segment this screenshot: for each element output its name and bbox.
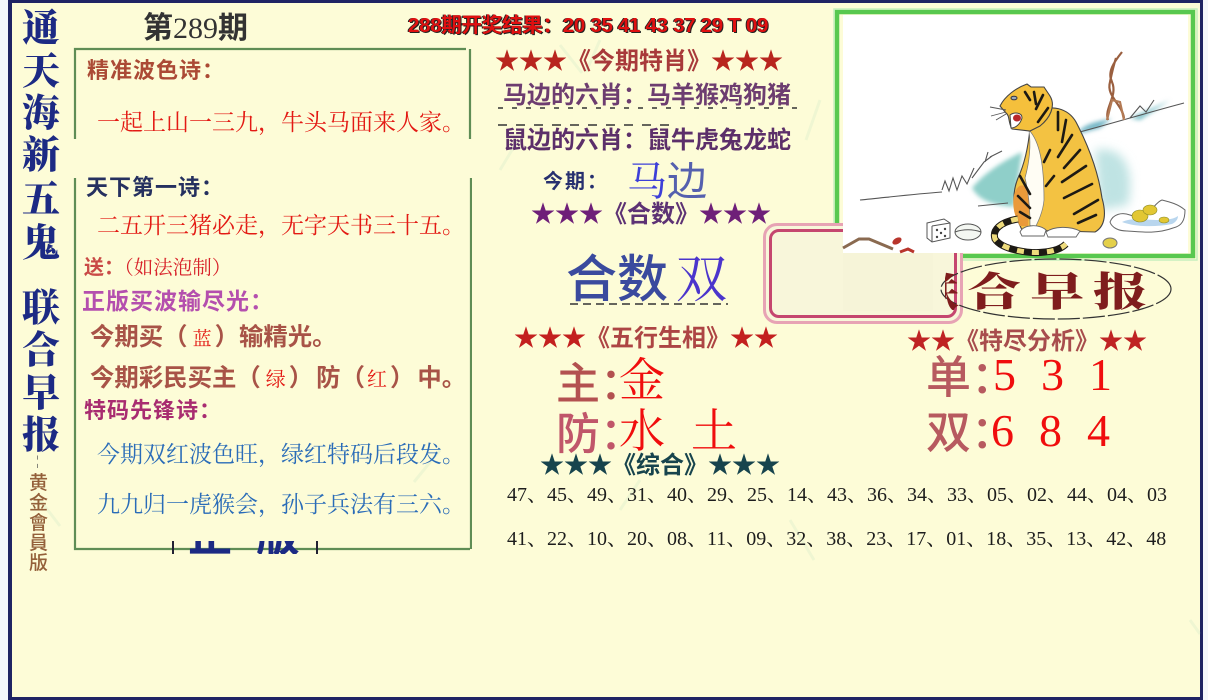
- watercolor hill shading: [1095, 149, 1130, 210]
- numbers row 1: 47、45、49、31、40、29、25、14、43、36、34、33、05、02、44、04、03: [507, 484, 1167, 506]
- heading: precise wave colour poem: 精准波色诗：: [87, 58, 225, 83]
- heading: combined: ★★★《综合》★★★: [540, 445, 780, 480]
- side title: vertical column: 联: [22, 277, 60, 332]
- numbers row 2: 41、22、10、20、08、11、09、32、38、23、17、01、18、35、13、42、48: [507, 528, 1166, 550]
- side title: vertical column: [22, 0, 60, 574]
- heading: first poem under heaven: 天下第一诗：: [86, 175, 224, 200]
- side title: vertical column: 报: [22, 404, 60, 459]
- heading: combined number: ★★★《合数》★★★: [531, 194, 771, 229]
- text: this issue: 今期：: [543, 171, 609, 193]
- side title: vertical column: 早: [22, 362, 60, 417]
- dashed rules: [498, 107, 797, 305]
- white chest: [1025, 130, 1044, 230]
- text: guard element: 防：: [556, 398, 644, 462]
- frame: pink double box: [763, 223, 963, 324]
- red branch: [843, 239, 893, 249]
- text: horse side: 马边的六肖：马羊猴鸡狗猪: [503, 82, 791, 109]
- body: [1014, 108, 1104, 232]
- side title: vertical column: 鬼: [22, 212, 60, 267]
- paws: [1020, 226, 1080, 237]
- orange haunch: [1013, 185, 1030, 226]
- side title: vertical column: 天: [22, 40, 60, 95]
- text: poem 1: 一起上山一三九，牛头马面来人家。: [97, 110, 465, 135]
- stripes: [1018, 92, 1098, 223]
- branches: [1107, 52, 1124, 120]
- side title: vertical column: 新: [22, 124, 60, 179]
- side title: vertical column: ¦: [36, 454, 39, 469]
- side title: vertical column: 海: [22, 82, 60, 137]
- issue heading: 第289期: [143, 3, 248, 47]
- bowl: [955, 224, 981, 240]
- text: gift note: 送：（如法泡制）: [84, 257, 231, 279]
- text: gold: 金: [619, 355, 665, 406]
- panel: tiger illustration: [843, 15, 1188, 253]
- text: combined number double: 合数双: [566, 238, 727, 312]
- previous result line: 288期开奖结果：20 35 41 43 37 29 T 09: [408, 14, 768, 37]
- text: poem 3: 今期双红波色旺，绿红特码后段发。: [97, 442, 465, 467]
- numbers: even: 684: [991, 405, 1135, 456]
- dice: [927, 219, 950, 242]
- heading: special zodiac: ★★★《今期特肖》★★★: [495, 41, 783, 76]
- title fragment: joint morning paper: 合早报: [967, 260, 1156, 317]
- heading: tail analysis: ★★《特尽分析》★★: [907, 321, 1147, 356]
- heading: special code poem: 特码先锋诗：: [84, 398, 222, 423]
- side title: vertical column: 五: [22, 168, 60, 223]
- side title: vertical column: 合: [22, 319, 60, 374]
- text: water earth: 水 土: [619, 406, 737, 457]
- heading: genuine: 正版买波输尽光：: [82, 288, 274, 314]
- text: even: 双：: [926, 396, 1016, 461]
- text: rat side: 鼠边的六肖：鼠牛虎兔龙蛇: [503, 127, 791, 154]
- ground lines and grass: [860, 100, 1184, 206]
- text: horse side answer: 马边: [627, 149, 707, 207]
- panel: poems box: [74, 48, 472, 550]
- text: buy green line: 今期彩民买主（绿）防（红）中。: [90, 365, 466, 392]
- cream cover: [843, 253, 933, 311]
- tiger drawing: [842, 51, 1186, 256]
- heading: five elements: ★★★《五行生相》★★: [514, 318, 778, 353]
- text: poem 2: 二五开三猪必走，无字天书三十五。: [97, 213, 465, 238]
- tail: [994, 219, 1066, 252]
- green border: [833, 8, 1198, 261]
- text: odd: 单：: [926, 341, 1016, 406]
- side title: vertical column: 黄金會員版: [29, 473, 48, 574]
- broken bowl with gold: [1110, 200, 1185, 232]
- numbers: odd: 531: [993, 349, 1137, 400]
- text: main element: 主：: [556, 348, 644, 412]
- text: poem 4: 九九归一虎猴会，孙子兵法有三六。: [97, 492, 465, 517]
- text: buy blue line: 今期买（ 蓝）输精光。: [90, 324, 337, 351]
- head: [1000, 84, 1052, 131]
